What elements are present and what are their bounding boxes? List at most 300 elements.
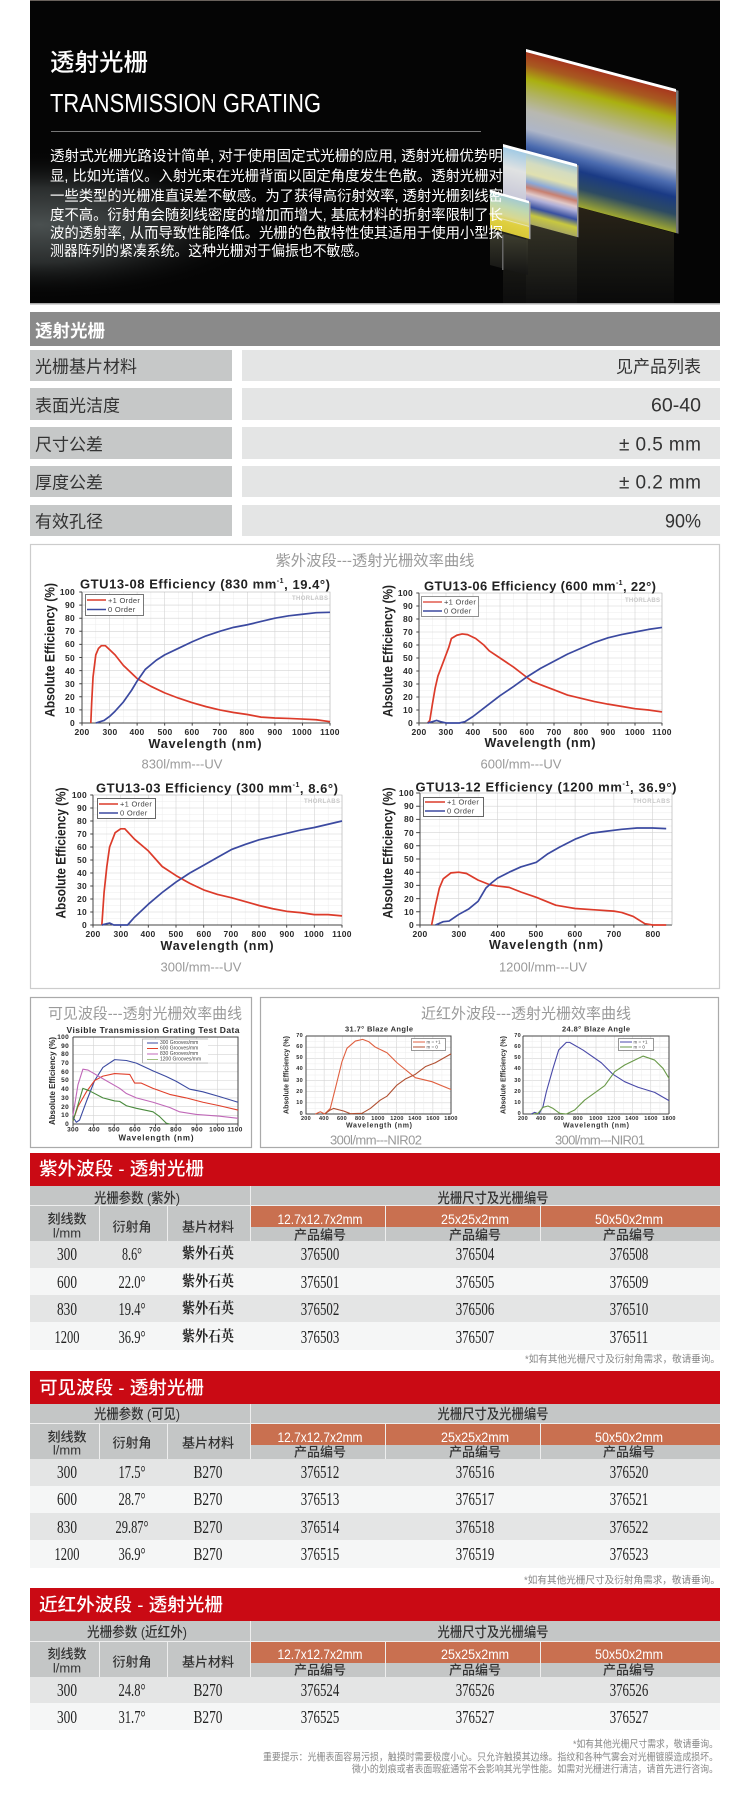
visible table heading [30, 1371, 720, 1404]
intro text block: 测器阵列的紧凑系统。这种光栅对于偏振也不敏感。 [50, 243, 368, 260]
chart: GTU13-03: 50 [77, 855, 87, 865]
chart: 31.7 degree blaze angle: 0 [300, 1111, 303, 1117]
chart: visible transmission grating test data: 900 [191, 1126, 203, 1133]
chart: GTU13-06: 800 [573, 727, 589, 737]
closing notes: 微小的划痕或者表面瑕疵通常不会影响其光学性能。如需对光栅进行清洁，请首先进行咨询。 [352, 1762, 718, 1776]
spec row: 厚度公差 [30, 466, 720, 497]
chart: GTU13-08: Absolute Efficiency (%) [42, 583, 58, 717]
chart: GTU13-08: 80 [65, 613, 75, 623]
spec row: 厚度公差: 厚度公差 [35, 474, 103, 492]
NIR table header: 12.7x12.7x2mm [278, 1646, 362, 1662]
chart: 31.7 degree blaze angle: m = +1 [426, 1040, 441, 1044]
chart: GTU13-12: 80 [404, 814, 414, 824]
intro text block [50, 147, 503, 260]
chart: 24.8 degree blaze angle: 1200 [607, 1116, 621, 1122]
chart: GTU13-08: THORLABS [292, 596, 328, 602]
intro text block: 一些类型的光栅准直误差不敏感。为了获得高衍射效率, 透射光栅刻线密 [50, 188, 503, 205]
visible table header: 光栅参数 (可见) [94, 1406, 180, 1422]
chart: 24.8 degree blaze angle: 10 [514, 1100, 521, 1106]
chart: GTU13-12: THORLABS [633, 799, 670, 805]
chart: 24.8 degree blaze angle: 0 [518, 1111, 521, 1117]
chart: GTU13-12: 0 [409, 920, 414, 930]
NIR table rows: 376526 [610, 1680, 648, 1700]
chart: 31.7 degree blaze angle: 30 [296, 1078, 303, 1084]
chart: GTU13-12: 90 [404, 801, 414, 811]
chart: GTU13-06: 50 [403, 653, 413, 663]
panel: UV efficiency curves [30, 544, 720, 988]
chart: GTU13-12: 1200l/mm---UV [499, 960, 587, 974]
chart: visible transmission grating test data: 60 [61, 1068, 69, 1076]
visible table rows: 600 [57, 1489, 77, 1509]
chart: 24.8 degree blaze angle: 1800 [662, 1116, 676, 1122]
NIR table rows: 300 [57, 1680, 77, 1700]
chart: GTU13-08: GTU13-08 Efficiency (830 mm [80, 576, 276, 592]
UV table rows: 19.4° [118, 1299, 146, 1319]
visible table rows: 28.7° [118, 1489, 146, 1509]
chart: GTU13-03: 200 [85, 929, 101, 939]
chart: GTU13-12: 60 [404, 841, 414, 851]
chart: GTU13-12: 30 [404, 880, 414, 890]
UV table header: 刻线数 [47, 1212, 87, 1226]
visible table rows: 376519 [456, 1544, 494, 1564]
NIR table header: 50x50x2mm [595, 1646, 663, 1662]
chart: GTU13-06: GTU13-06 Efficiency (600 mm [424, 578, 616, 594]
chart: GTU13-08: 100 [60, 587, 75, 597]
chart: GTU13-06: 40 [403, 666, 413, 676]
NIR table header: 基片材料 [182, 1654, 234, 1670]
visible table rows: 376514 [301, 1517, 339, 1537]
UV table footnote: *如有其他光栅尺寸及衍射角需求，敬请垂询。 [525, 1352, 720, 1366]
visible table header [30, 1404, 720, 1460]
UV table rows: 紫外石英 [182, 1327, 234, 1345]
chart: visible transmission grating test data: 10 [61, 1112, 69, 1118]
visible table rows: B270 [194, 1462, 222, 1482]
spec row: 光栅基片材料: 见产品列表 [616, 358, 701, 376]
chart: visible transmission grating test data: 800 [170, 1126, 182, 1133]
UV table header: 光栅尺寸及光栅编号 [438, 1190, 548, 1206]
chart: GTU13-12: 0 Order [447, 806, 475, 816]
chart: GTU13-06: 700 [546, 727, 562, 737]
chart: GTU13-12: 300 [451, 929, 467, 939]
chart: GTU13-03: -1 [293, 782, 299, 788]
NIR table rows: 376526 [456, 1680, 494, 1700]
chart: 31.7 degree blaze angle: 200 [301, 1116, 311, 1122]
NIR table rows: 376524 [301, 1680, 339, 1700]
UV table rows: 376501 [301, 1272, 339, 1292]
chart: GTU13-06: Wavelength (nm) [484, 736, 596, 750]
panel: UV product table [30, 1153, 720, 1366]
chart: GTU13-12: 10 [404, 907, 414, 917]
chart: GTU13-03: 10 [77, 907, 87, 917]
chart: GTU13-12: -1 [623, 780, 629, 788]
chart: 31.7 degree blaze angle: 1200 [390, 1116, 404, 1122]
chart: GTU13-03: 900 [279, 929, 295, 939]
chart: GTU13-03: 400 [140, 929, 156, 939]
chart: GTU13-06: THORLABS [625, 598, 660, 604]
chart: GTU13-08: 600 [184, 727, 200, 737]
chart: visible transmission grating test data: Absolute Efficiency (%) [47, 1037, 57, 1125]
chart: GTU13-03: 30 [77, 881, 87, 891]
visible table rows: 376523 [610, 1544, 648, 1564]
chart: visible transmission grating test data: 50 [61, 1076, 69, 1084]
chart: GTU13-03: Absolute Efficiency (%) [54, 788, 68, 918]
chart: GTU13-03: 600 [196, 929, 212, 939]
visible table rows: 1200 [54, 1544, 80, 1564]
visible table rows: 17.5° [118, 1462, 146, 1482]
chart: GTU13-06: 600l/mm---UV [481, 756, 562, 772]
chart: visible transmission grating test data: 40 [61, 1086, 69, 1092]
visible table header: 刻线数 [47, 1430, 87, 1444]
NIR table rows: 31.7° [118, 1707, 146, 1727]
visible table rows: 830 [57, 1517, 77, 1537]
chart: 31.7 degree blaze angle [282, 1024, 458, 1148]
NIR table rows: 376527 [456, 1707, 494, 1727]
NIR table header: 光栅尺寸及光栅编号 [438, 1624, 548, 1640]
UV table heading: 紫外波段 - 透射光栅 [39, 1159, 204, 1179]
NIR table rows: 24.8° [118, 1680, 146, 1700]
UV table rows: 600 [57, 1272, 77, 1292]
chart: GTU13-03: 800 [251, 929, 267, 939]
chart: GTU13-06: 200 [411, 727, 427, 737]
chart: visible transmission grating test data: Wavelength (nm) [118, 1134, 194, 1142]
chart: visible transmission grating test data: 80 [61, 1050, 69, 1058]
NIR table header [30, 1621, 720, 1678]
visible table footnote: *如有其他光栅尺寸及衍射角需求，敬请垂询。 [524, 1574, 720, 1586]
chart: 24.8 degree blaze angle [498, 1024, 676, 1148]
chart: GTU13-03: 300 [113, 929, 129, 939]
UV panel heading: 紫外波段---透射光栅效率曲线 [276, 552, 474, 570]
chart: 31.7 degree blaze angle: 31.7° Blaze Angle [345, 1024, 413, 1034]
chart: 31.7 degree blaze angle: 20 [296, 1089, 303, 1095]
chart: 24.8 degree blaze angle: 20 [514, 1089, 521, 1095]
chart: 24.8 degree blaze angle: 70 [514, 1033, 521, 1039]
chart: visible transmission grating test data: 70 [61, 1060, 69, 1066]
chart: 24.8 degree blaze angle: 40 [514, 1066, 521, 1072]
chart: GTU13-12: 50 [404, 854, 414, 864]
visible table header: 产品编号 [603, 1444, 655, 1460]
chart: GTU13-08: 700 [212, 727, 228, 737]
spec row: 表面光洁度 [30, 388, 720, 420]
chart: GTU13-03: , 8.6°) [300, 780, 338, 796]
chart: GTU13-06: 0 Order [444, 606, 472, 616]
chart: GTU13-08 [42, 576, 340, 772]
chart: GTU13-12: 500 [528, 929, 544, 939]
chart: GTU13-06 [380, 578, 672, 772]
UV table rows: 紫外石英 [182, 1272, 234, 1290]
NIR table rows: B270 [194, 1680, 222, 1700]
UV table rows: 376510 [610, 1299, 648, 1319]
UV table rows: 300 [57, 1244, 77, 1264]
UV table rows: 376504 [456, 1244, 494, 1264]
spec row: 有效孔径: 90% [665, 512, 701, 532]
UV table header: l/mm [53, 1226, 81, 1240]
chart: visible transmission grating test data: 300 [67, 1126, 79, 1133]
chart: GTU13-08: +1 Order [108, 596, 140, 605]
chart: GTU13-06: 80 [403, 614, 413, 624]
chart: 24.8 degree blaze angle: Absolute Efficiency (%) [498, 1036, 508, 1114]
spec row: 光栅基片材料: 光栅基片材料 [35, 358, 137, 376]
spec row: 表面光洁度: 表面光洁度 [35, 396, 120, 416]
chart: GTU13-08: 400 [129, 727, 145, 737]
chart: 24.8 degree blaze angle: 300l/mm---NIR01 [555, 1132, 645, 1148]
chart: 31.7 degree blaze angle: 1000 [371, 1116, 385, 1122]
chart: 24.8 degree blaze angle: 1600 [644, 1116, 658, 1122]
chart: GTU13-06: 1100 [652, 727, 672, 737]
chart: GTU13-08: , 19.4°) [284, 576, 330, 592]
visible table rows: B270 [194, 1489, 222, 1509]
chart: visible transmission grating test data: 20 [61, 1104, 69, 1110]
chart: GTU13-12: 200 [412, 929, 428, 939]
chart: GTU13-06: 100 [398, 588, 413, 598]
chart: GTU13-08: 900 [267, 727, 283, 737]
chart: GTU13-06: , 22°) [623, 578, 656, 594]
chart: 24.8 degree blaze angle: 60 [514, 1044, 521, 1050]
chart: GTU13-12: 70 [404, 828, 414, 838]
visible table rows: 376518 [456, 1517, 494, 1537]
spec row: 有效孔径 [30, 505, 720, 536]
chart: GTU13-03: 1000 [304, 929, 324, 939]
UV table rows: 376511 [610, 1327, 648, 1347]
visible table rows: B270 [194, 1517, 222, 1537]
chart: GTU13-08: 830l/mm---UV [142, 756, 223, 772]
chart: GTU13-12 [380, 780, 676, 974]
chart: 24.8 degree blaze angle: m = +1 [634, 1040, 648, 1044]
chart: GTU13-08: 0 [70, 718, 75, 728]
chart: visible transmission grating test data: 500 [108, 1126, 120, 1133]
chart: 24.8 degree blaze angle: 200 [518, 1116, 528, 1122]
chart: visible transmission grating test data: 0 [65, 1120, 69, 1128]
visible table rows [30, 1459, 720, 1568]
visible table rows: 36.9° [118, 1544, 146, 1564]
UV table rows: 376503 [301, 1327, 339, 1347]
chart: GTU13-03: 0 Order [120, 808, 148, 818]
spec row: 厚度公差: ± 0.2 mm [619, 472, 701, 494]
UV table header: 50x50x2mm [595, 1211, 663, 1227]
chart: GTU13-08: 200 [74, 727, 90, 737]
chart: visible transmission grating test data: 830 Grooves/mm [160, 1051, 198, 1057]
chart: visible transmission grating test data: 400 [88, 1126, 100, 1133]
chart: GTU13-08: 500 [157, 727, 173, 737]
chart: 31.7 degree blaze angle: 40 [296, 1066, 303, 1072]
visible table rows: 376515 [301, 1544, 339, 1564]
chart: GTU13-03: 500 [168, 929, 184, 939]
chart: GTU13-12: 40 [404, 867, 414, 877]
chart: GTU13-08: 50 [65, 653, 75, 663]
chart: GTU13-06: 60 [403, 640, 413, 650]
chart: GTU13-08: 70 [65, 626, 75, 636]
spec row: 表面光洁度: 60-40 [651, 396, 701, 416]
chart: GTU13-12: 700 [606, 929, 622, 939]
chart: GTU13-12: 800 [645, 929, 661, 939]
chart: visible transmission grating test data: 1100 [227, 1126, 243, 1133]
UV table rows: 22.0° [118, 1272, 146, 1292]
chart: GTU13-08: 40 [65, 666, 75, 676]
UV table rows: 376500 [301, 1244, 339, 1264]
chart: GTU13-12: +1 Order [447, 798, 479, 806]
intro text block: 显, 比如光谱仪。入射光束在光栅背面以固定角度发生色散。透射光栅对 [50, 168, 503, 185]
chart: GTU13-03: +1 Order [120, 800, 152, 808]
UV table rows: 8.6° [122, 1244, 142, 1264]
chart: GTU13-06: 90 [403, 601, 413, 611]
visible table rows: 376522 [610, 1517, 648, 1537]
chart: GTU13-06: 900 [600, 727, 616, 737]
NIR table rows: B270 [194, 1707, 222, 1727]
visible table header: 12.7x12.7x2mm [278, 1429, 362, 1445]
chart: GTU13-08: 1100 [320, 727, 340, 737]
hero panel [30, 0, 720, 304]
closing notes: *如有其他光栅尺寸需求，敬请垂询。 [573, 1738, 718, 1750]
chart: GTU13-03: 300l/mm---UV [161, 960, 242, 974]
chart: GTU13-03 [54, 780, 352, 974]
NIR table header: 产品编号 [449, 1662, 501, 1678]
chart: GTU13-06: 0 [408, 718, 413, 728]
NIR table rows [30, 1677, 720, 1730]
chart: GTU13-03: 20 [77, 894, 87, 904]
UV table rows: 376502 [301, 1299, 339, 1319]
chart: GTU13-06: 1000 [625, 727, 645, 737]
chart: visible transmission grating test data [47, 1025, 243, 1142]
intro text block: 透射式光栅光路设计简单, 对于使用固定式光栅的应用, 透射光栅优势明 [50, 147, 503, 165]
UV table rows: 376508 [610, 1244, 648, 1264]
chart: GTU13-03: 80 [77, 816, 87, 826]
chart: GTU13-08: 1000 [292, 727, 312, 737]
chart: GTU13-03: GTU13-03 Efficiency (300 mm [96, 780, 292, 796]
chart: GTU13-08: -1 [277, 578, 284, 584]
chart: GTU13-06: 10 [403, 705, 413, 715]
chart: GTU13-08: 10 [65, 705, 75, 715]
visible table rows: 376512 [301, 1462, 339, 1482]
visible table rows: 376521 [610, 1489, 648, 1509]
panel: visible efficiency curves [30, 998, 252, 1148]
NIR table header: 刻线数 [47, 1646, 87, 1662]
NIR table rows: 376525 [301, 1707, 339, 1727]
NIR table header: 光栅参数 (近红外) [87, 1624, 187, 1640]
chart: GTU13-12: 400 [490, 929, 506, 939]
chart: GTU13-08: 0 Order [108, 605, 136, 614]
spec heading [30, 312, 720, 346]
chart: GTU13-12: 20 [404, 894, 414, 904]
chart: 31.7 degree blaze angle: 1800 [444, 1116, 458, 1122]
subtitle: TRANSMISSION GRATING: TRANSMISSION GRATING [50, 88, 321, 118]
chart: GTU13-03: 70 [77, 829, 87, 839]
NIR table header: 产品编号 [294, 1662, 346, 1678]
chart: GTU13-08: 800 [239, 727, 255, 737]
chart: visible transmission grating test data: Visible Transmission Grating Test Data [66, 1025, 240, 1035]
NIR table rows: 376527 [610, 1707, 648, 1727]
chart: 31.7 degree blaze angle: 1600 [426, 1116, 440, 1122]
chart: GTU13-06: +1 Order [444, 598, 476, 606]
NIR table heading: 近红外波段 - 透射光栅 [39, 1595, 223, 1615]
NIR table header: 衍射角 [112, 1654, 152, 1670]
visible table rows: 300 [57, 1462, 77, 1482]
UV table rows: 376506 [456, 1299, 494, 1319]
chart: 24.8 degree blaze angle: Wavelength (nm) [563, 1122, 629, 1130]
NIR panel heading: 近红外波段---透射光栅效率曲线 [421, 1006, 631, 1022]
chart: GTU13-06: Absolute Efficiency (%) [380, 585, 396, 717]
spec row: 光栅基片材料 [30, 350, 720, 381]
chart: visible transmission grating test data: 30 [61, 1094, 69, 1102]
chart: 24.8 degree blaze angle: 24.8° Blaze Angle [562, 1024, 630, 1034]
chart: visible transmission grating test data: 600 Grooves/mm [160, 1046, 198, 1052]
chart: GTU13-06: 500 [492, 727, 508, 737]
chart: 24.8 degree blaze angle: 400 [536, 1116, 546, 1122]
chart: 24.8 degree blaze angle: 1000 [589, 1116, 603, 1122]
chart: 24.8 degree blaze angle: m = 0 [634, 1044, 645, 1050]
chart: GTU13-08: 300 [102, 727, 118, 737]
chart: 31.7 degree blaze angle: 600 [337, 1116, 347, 1122]
visible table rows: B270 [194, 1544, 222, 1564]
chart: visible transmission grating test data: 1000 [209, 1126, 225, 1133]
chart: GTU13-12: , 36.9°) [630, 780, 676, 794]
title: 透射光栅: 透射光栅 [50, 50, 148, 76]
visible table header: 25x25x2mm [441, 1429, 509, 1445]
visible table header: 产品编号 [294, 1444, 346, 1460]
chart: 31.7 degree blaze angle: 10 [296, 1100, 303, 1106]
visible table header: 光栅尺寸及光栅编号 [438, 1406, 548, 1422]
visible table rows: 376517 [456, 1489, 494, 1509]
chart: visible transmission grating test data: 1200 Grooves/mm [160, 1056, 201, 1062]
visible table header: 衍射角 [112, 1436, 152, 1450]
chart: visible transmission grating test data: 90 [61, 1042, 69, 1050]
chart: 31.7 degree blaze angle: m = 0 [426, 1044, 438, 1050]
UV table header: 产品编号 [294, 1228, 346, 1242]
chart: 24.8 degree blaze angle: 800 [573, 1116, 583, 1122]
UV table rows: 紫外石英 [182, 1244, 234, 1262]
chart: visible transmission grating test data: 600 [129, 1126, 141, 1133]
chart: 31.7 degree blaze angle: 400 [319, 1116, 329, 1122]
visible table rows: 29.87° [116, 1517, 148, 1537]
visible table header: l/mm [53, 1442, 81, 1458]
chart: GTU13-06: 300 [438, 727, 454, 737]
chart: GTU13-06: 30 [403, 679, 413, 689]
spec row: 尺寸公差 [30, 427, 720, 459]
spec row: 尺寸公差: 尺寸公差 [35, 436, 103, 454]
panel: visible product table [30, 1371, 720, 1586]
chart: GTU13-06: -1 [616, 580, 623, 586]
UV table rows: 36.9° [118, 1327, 146, 1347]
chart: GTU13-03: 60 [77, 842, 87, 852]
chart: GTU13-03: THORLABS [304, 799, 340, 805]
NIR table header: 产品编号 [603, 1662, 655, 1678]
visible table header: 产品编号 [449, 1444, 501, 1460]
NIR table rows: 300 [57, 1707, 77, 1727]
visible table rows: 376520 [610, 1462, 648, 1482]
chart: 31.7 degree blaze angle: 60 [296, 1044, 303, 1050]
chart: GTU13-03: 40 [77, 868, 87, 878]
UV table rows: 830 [57, 1299, 77, 1319]
chart: GTU13-03: 1100 [332, 929, 352, 939]
UV table header: 光栅参数 (紫外) [94, 1190, 180, 1206]
chart: visible transmission grating test data: 100 [57, 1034, 69, 1040]
chart: visible transmission grating test data: 700 [149, 1126, 161, 1133]
panel: near-infrared efficiency curves [260, 998, 718, 1148]
UV table header: 衍射角 [112, 1220, 152, 1234]
chart: GTU13-08: Wavelength (nm) [148, 737, 262, 751]
UV table rows: 376507 [456, 1327, 494, 1347]
chart: GTU13-12: 100 [399, 788, 414, 798]
chart: visible transmission grating test data: 300 Grooves/mm [160, 1040, 198, 1046]
UV table header: 产品编号 [449, 1228, 501, 1242]
chart: GTU13-08: 20 [65, 692, 75, 702]
UV table header [30, 1186, 720, 1242]
visible table rows: 376513 [301, 1489, 339, 1509]
visible table header: 50x50x2mm [595, 1429, 663, 1445]
chart: 24.8 degree blaze angle: 600 [554, 1116, 564, 1122]
chart: 31.7 degree blaze angle: Wavelength (nm) [346, 1122, 412, 1130]
UV table rows [30, 1241, 720, 1350]
visible table heading: 可见波段 - 透射光栅 [39, 1378, 204, 1398]
intro text block: 波的透射率, 从而导致性能降低。光栅的色散特性使其适用于使用小型探 [50, 225, 503, 242]
